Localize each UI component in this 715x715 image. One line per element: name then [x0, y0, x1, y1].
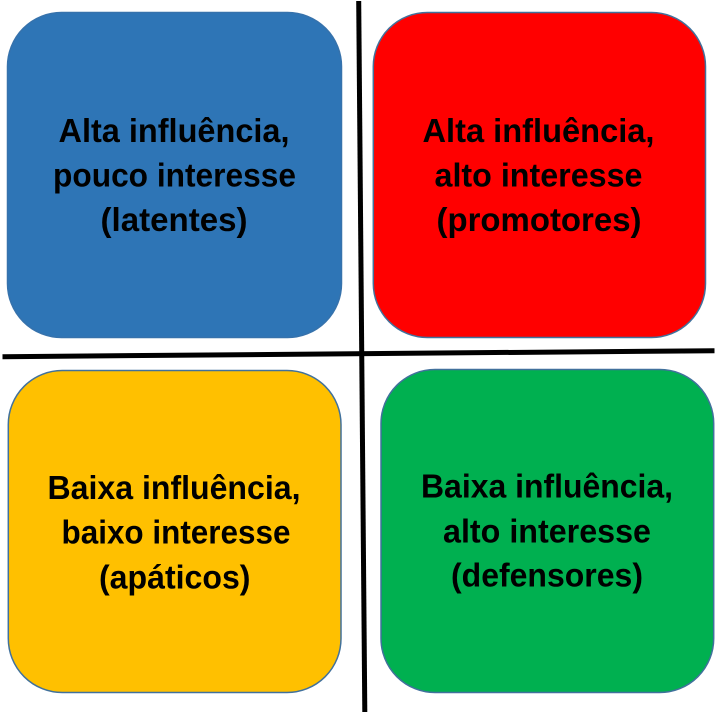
- panel: defensores: alto interesse: [443, 512, 651, 550]
- panel: promotores: Alta influência,: [422, 112, 654, 149]
- panel: defensores: [381, 370, 714, 692]
- panel: latentes: [8, 12, 342, 338]
- panel: apáticos: [8, 370, 341, 692]
- panel: promotores: (promotores): [436, 201, 642, 238]
- panel: apáticos: Baixa influência,: [48, 469, 300, 506]
- panel: promotores: [373, 12, 706, 338]
- panel: apáticos: baixo interesse: [62, 514, 290, 550]
- vertical axis: [359, 1, 365, 712]
- horizontal axis: [2, 351, 714, 357]
- panel: latentes: pouco interesse: [53, 156, 296, 194]
- panel: latentes: (latentes): [100, 201, 248, 238]
- panel: apáticos: (apáticos): [99, 558, 250, 596]
- panel: defensores: Baixa influência,: [421, 468, 673, 505]
- panel: latentes: Alta influência,: [58, 112, 290, 149]
- panel: promotores: alto interesse: [434, 156, 642, 194]
- panel: defensores: (defensores): [451, 557, 643, 594]
